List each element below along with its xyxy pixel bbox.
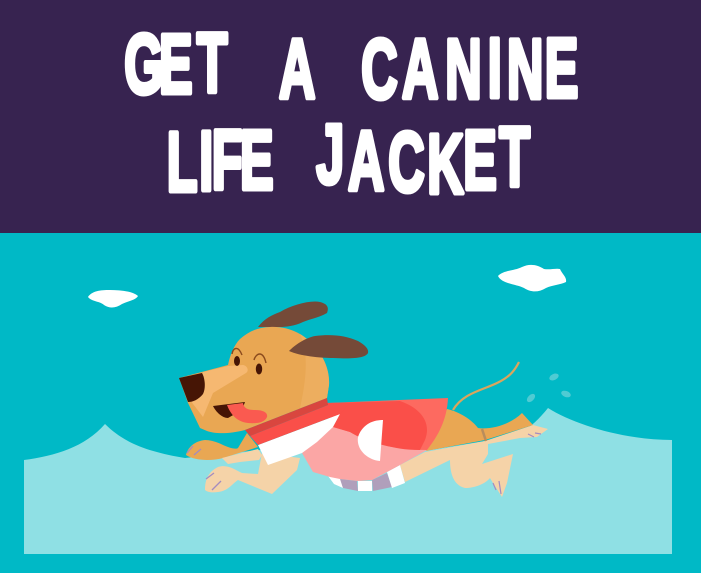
hind toes bbox=[493, 433, 541, 494]
header band bbox=[0, 0, 701, 233]
cloud: left bbox=[88, 290, 138, 308]
rear body bbox=[426, 409, 533, 451]
muzzle bbox=[190, 365, 248, 417]
vest: white spot bbox=[358, 420, 383, 461]
title line 1: GET A CANINE bbox=[124, 16, 578, 116]
splash drops bbox=[525, 372, 572, 404]
vest: white stripe bbox=[258, 414, 340, 465]
head: light patch bbox=[300, 334, 329, 408]
hind leg bbox=[400, 425, 548, 497]
dog bbox=[179, 302, 548, 497]
mouth bbox=[213, 402, 245, 418]
vest: red inner bbox=[327, 401, 427, 450]
title bbox=[124, 16, 578, 211]
ear: front bbox=[289, 335, 368, 358]
vest: red bbox=[327, 398, 448, 450]
collar bbox=[250, 403, 350, 445]
cloud: right bbox=[498, 265, 566, 291]
vest: pink bbox=[302, 414, 427, 481]
nose bbox=[179, 373, 205, 402]
collar shade bbox=[245, 398, 328, 436]
front leg: orange paw bbox=[186, 433, 258, 460]
toes bbox=[187, 446, 221, 490]
belly stripes bbox=[328, 465, 405, 491]
tail bbox=[453, 362, 519, 410]
eyes bbox=[234, 356, 262, 374]
title line 2: LIFE JACKET bbox=[167, 107, 530, 211]
head bbox=[179, 327, 329, 433]
water bbox=[24, 408, 672, 554]
ear: back bbox=[258, 302, 328, 327]
eyebrows bbox=[232, 348, 266, 363]
rear leg band bbox=[482, 429, 486, 441]
tongue bbox=[227, 403, 267, 423]
front legs: peach bbox=[205, 449, 300, 494]
